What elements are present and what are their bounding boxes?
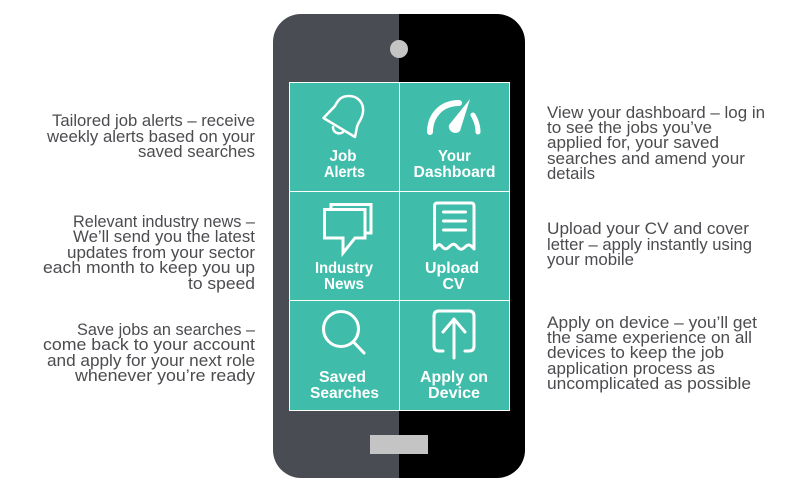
text: view dashboard: to see the jobs you’ve — [547, 118, 712, 137]
text: save jobs: Save jobs an searches – — [77, 320, 256, 339]
text: save jobs: and apply for your next role — [47, 351, 255, 370]
label: apply on device — [420, 369, 488, 402]
icon: upload arrow frame — [434, 311, 474, 358]
label: saved searches: Saved — [319, 369, 366, 386]
text: relevant industry news: to speed — [188, 274, 255, 293]
label: apply on device: Device — [428, 385, 480, 402]
label: job alerts: Job — [330, 148, 357, 165]
text: tailored job alerts: weekly alerts based on your — [46, 127, 255, 146]
tile: job alerts — [324, 96, 365, 181]
label: upload cv: CV — [442, 276, 465, 293]
tile: apply on device — [420, 311, 488, 402]
text: upload cv — [547, 219, 752, 269]
icon: magnifying glass — [324, 312, 364, 353]
tile: industry news — [315, 204, 373, 293]
text: view dashboard — [547, 103, 765, 183]
icon: speech bubbles — [324, 204, 371, 253]
label: saved searches: Searches — [310, 385, 379, 402]
phone body — [273, 14, 525, 478]
text: upload cv: letter – apply instantly using — [547, 235, 752, 254]
text: save jobs: come back to your account — [43, 335, 255, 354]
text: relevant industry news: Relevant industry news – — [73, 212, 256, 231]
icon: gauge — [430, 99, 478, 133]
text: view dashboard: applied for, your saved — [547, 133, 719, 152]
tile: saved searches — [310, 312, 379, 402]
text: relevant industry news: We’ll send you the latest — [73, 227, 255, 246]
label: industry news — [315, 260, 373, 293]
text: apply on device: uncomplicated as possible — [547, 374, 751, 393]
phone camera — [390, 40, 408, 58]
text: view dashboard: searches and amend your — [547, 149, 745, 168]
text: upload cv: your mobile — [547, 250, 634, 269]
label: job alerts — [324, 148, 365, 181]
label: your dashboard — [414, 148, 496, 181]
text: apply on device: Apply on device – you’ll get — [547, 313, 757, 332]
label: your dashboard: Dashboard — [414, 164, 496, 181]
text: tailored job alerts: saved searches — [138, 142, 255, 161]
text: save jobs — [43, 320, 256, 385]
label: upload cv: Upload — [425, 260, 479, 277]
text: view dashboard: details — [547, 164, 595, 183]
icon: cv document — [434, 203, 474, 249]
icon: bell — [324, 96, 363, 137]
label: upload cv — [425, 260, 479, 293]
text: relevant industry news: updates from your sector — [67, 243, 255, 262]
text: tailored job alerts — [46, 111, 255, 161]
text: upload cv: Upload your CV and cover — [547, 219, 749, 238]
label: industry news: News — [324, 276, 364, 293]
tile: upload cv — [425, 203, 479, 293]
label: industry news: Industry — [315, 260, 373, 277]
text: apply on device: devices to keep the job — [547, 343, 724, 362]
tile: your dashboard — [414, 99, 496, 181]
label: saved searches — [310, 369, 379, 402]
label: job alerts: Alerts — [324, 164, 365, 181]
label: apply on device: Apply on — [420, 369, 488, 386]
text: apply on device — [547, 313, 757, 393]
text: relevant industry news: each month to keep you up — [43, 258, 255, 277]
label: your dashboard: Your — [438, 148, 471, 165]
text: apply on device: the same experience on all — [547, 328, 752, 347]
phone home button — [370, 435, 428, 454]
text: apply on device: application process as — [547, 359, 715, 378]
app grid panel — [289, 82, 510, 410]
text: save jobs: whenever you’re ready — [74, 366, 256, 385]
text: relevant industry news — [43, 212, 256, 293]
text: view dashboard: View your dashboard – log in — [547, 103, 765, 122]
text: tailored job alerts: Tailored job alerts – receive — [52, 111, 255, 130]
